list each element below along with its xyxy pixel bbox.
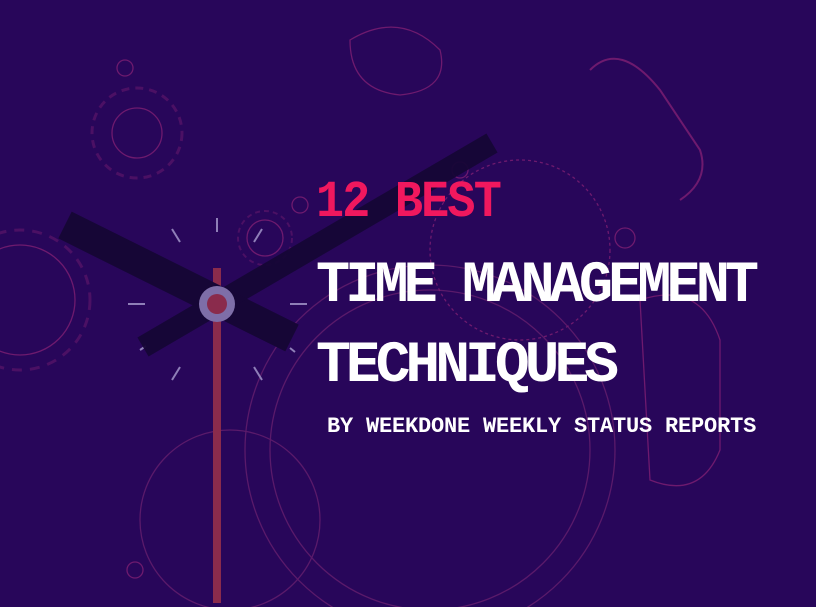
center pin <box>199 286 235 322</box>
clock ticks <box>128 218 307 380</box>
title: TIME MANAGEMENT: TIME MANAGEMENT <box>316 254 754 319</box>
title: TECHNIQUES: TECHNIQUES <box>316 334 614 399</box>
subtitle: BY WEEKDONE WEEKLY STATUS REPORTS <box>327 414 756 439</box>
title: 12 BEST: 12 BEST <box>316 173 500 232</box>
hour hand <box>65 225 292 338</box>
red second hand <box>213 268 221 603</box>
minute hand <box>143 143 492 347</box>
